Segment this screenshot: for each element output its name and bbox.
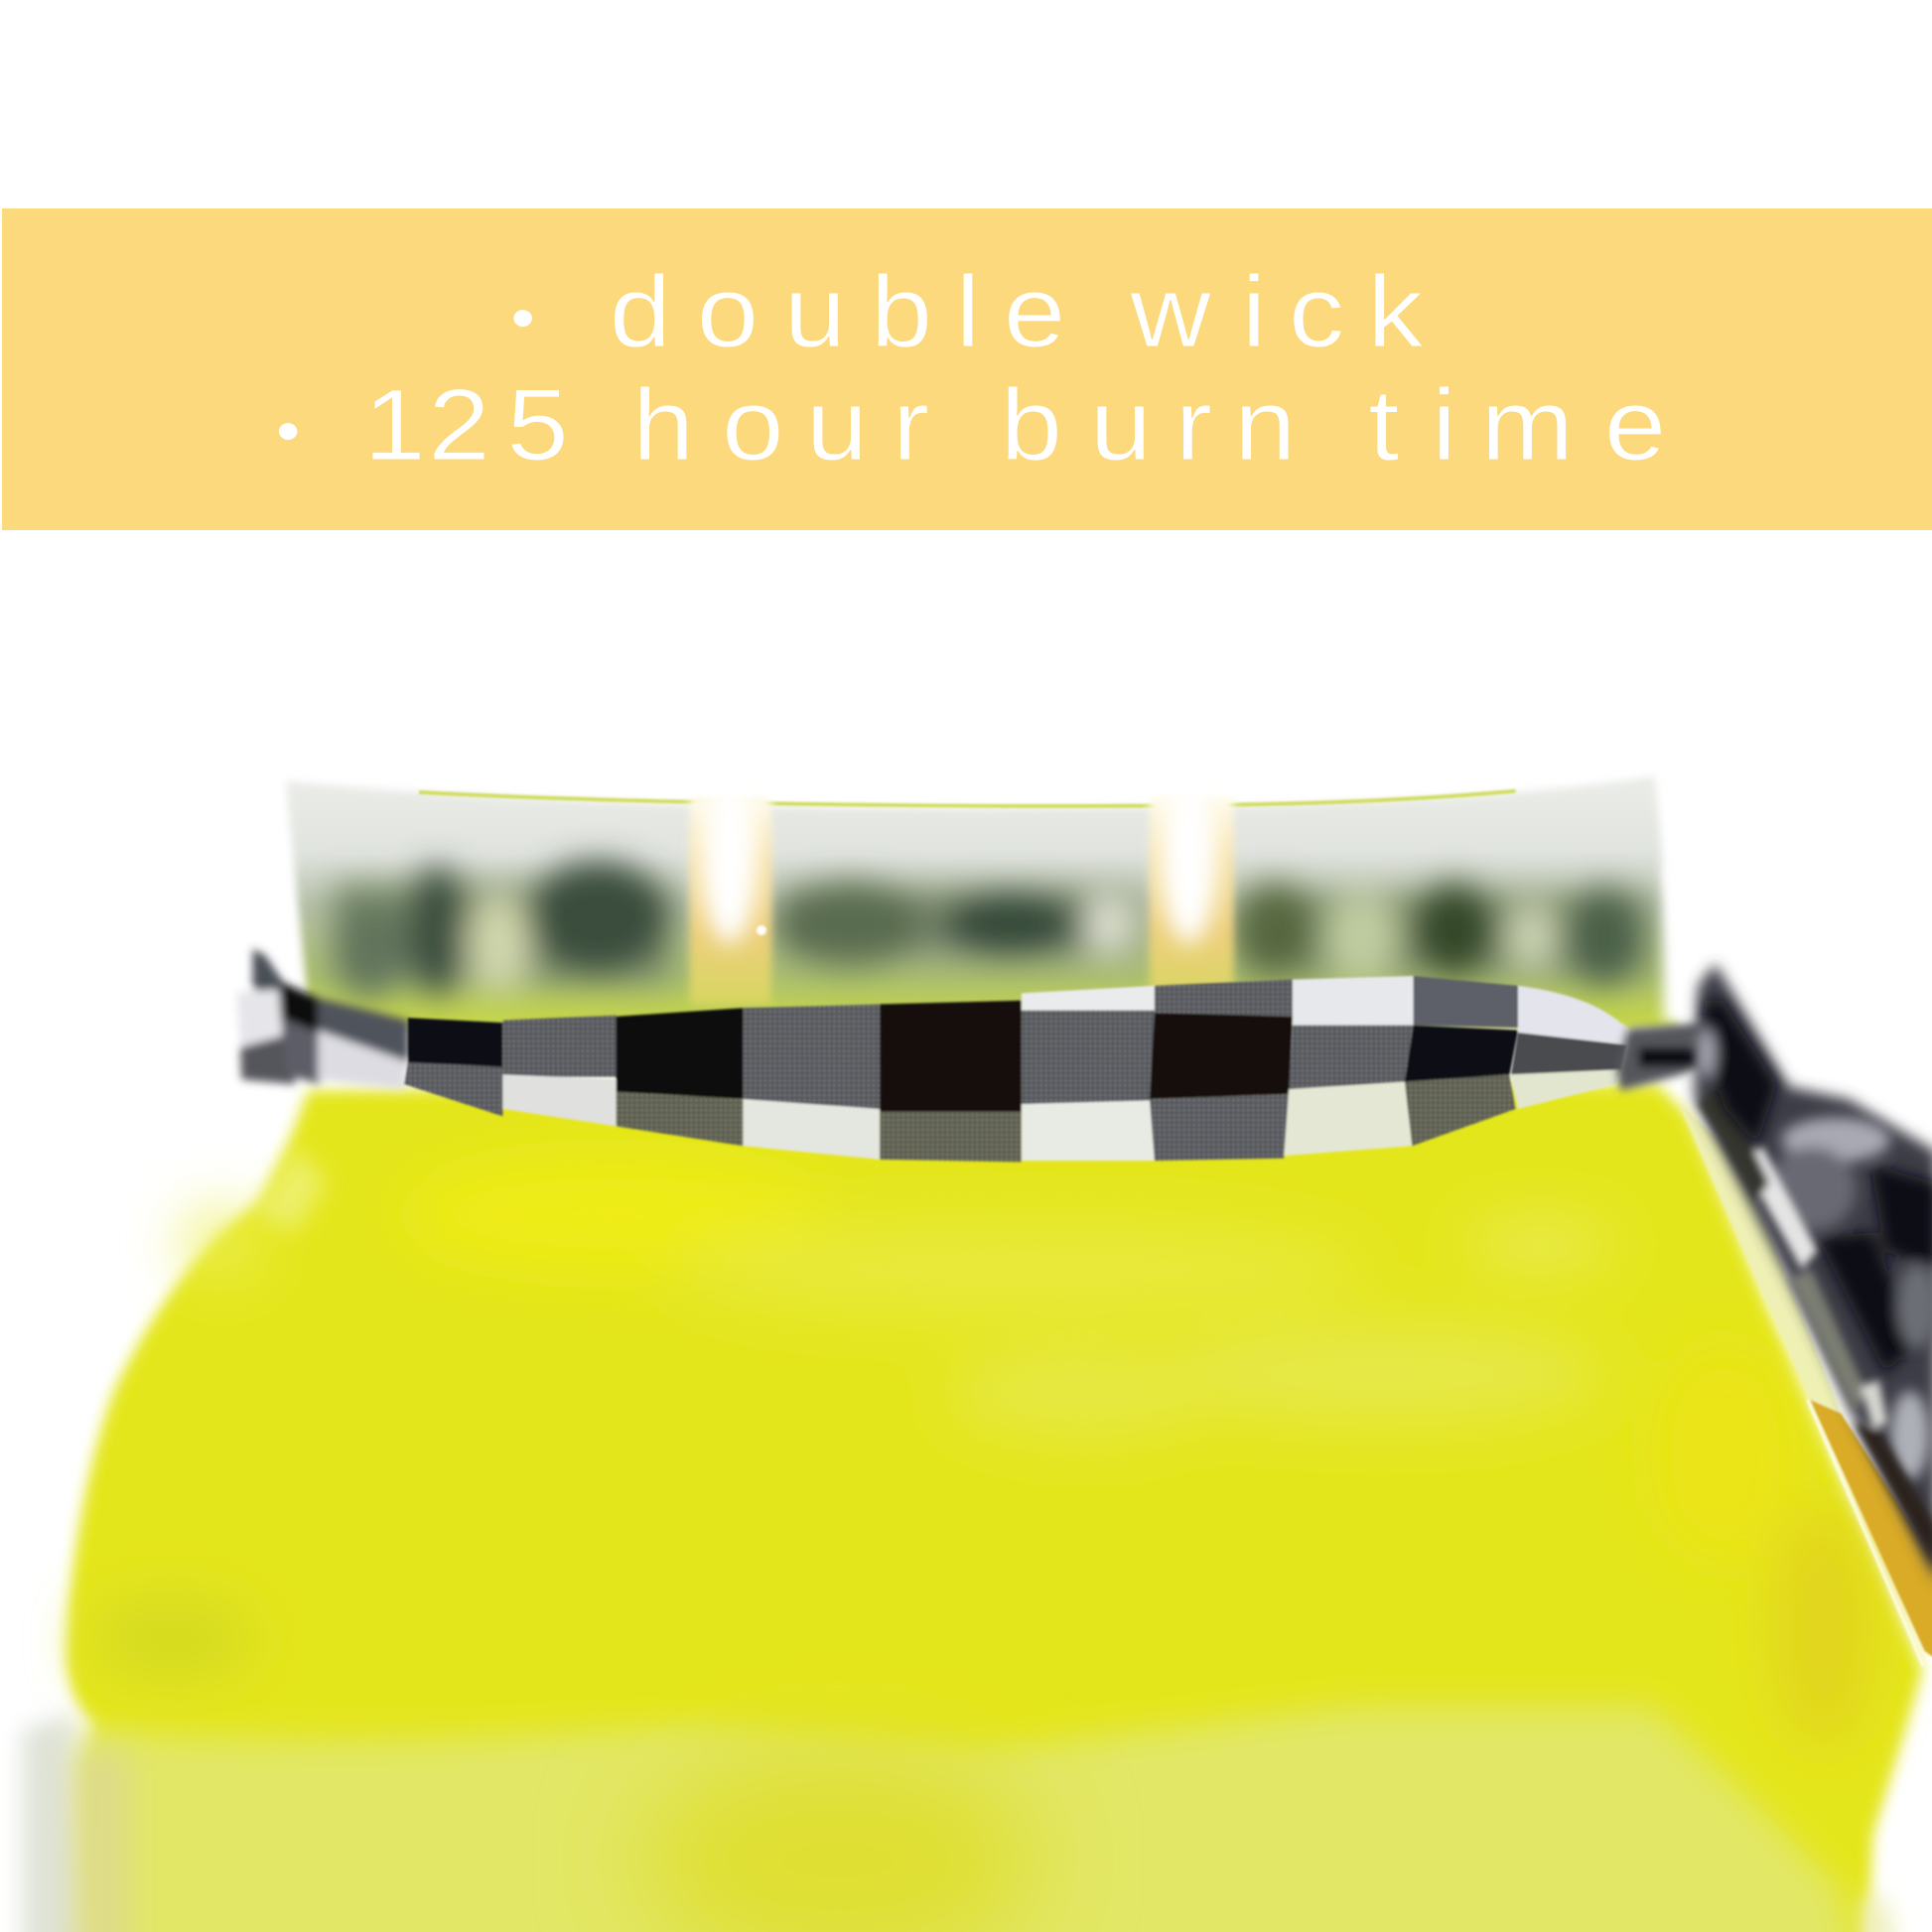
- jar body lower pale wax: [22, 1707, 1900, 1932]
- glass neck of jar: [286, 776, 1691, 1029]
- left ribbon end: [236, 949, 409, 1089]
- refracted checks in glass: [333, 862, 1649, 998]
- rim line: [419, 791, 1516, 806]
- banner line: double wick: •: [511, 283, 535, 351]
- right glass base: [1863, 1897, 1900, 1932]
- banner line: double wick: double wick: [610, 255, 1424, 368]
- banner line: 125 hour burn time: •: [276, 396, 300, 465]
- left glass base: [22, 1713, 88, 1932]
- gingham ribbon band: [236, 949, 1716, 1162]
- wax shading blotches: [86, 1159, 1872, 1749]
- jar body main yellow wax: [67, 1084, 1922, 1932]
- ribbon check cells: [408, 1018, 502, 1069]
- ribbon tail: [1695, 964, 1932, 1584]
- right wick flame: [1150, 781, 1233, 1006]
- ribbon knot: [1698, 1001, 1777, 1146]
- left wick flame: [690, 781, 771, 1006]
- banner line: 125 hour burn time: 125 hour burn time: [363, 368, 1666, 482]
- glass edge highlight: [1663, 863, 1691, 1023]
- candle jar photograph: [22, 776, 1932, 1932]
- hang tag gold: [1678, 1103, 1932, 1666]
- yellow banner: [2, 208, 1932, 530]
